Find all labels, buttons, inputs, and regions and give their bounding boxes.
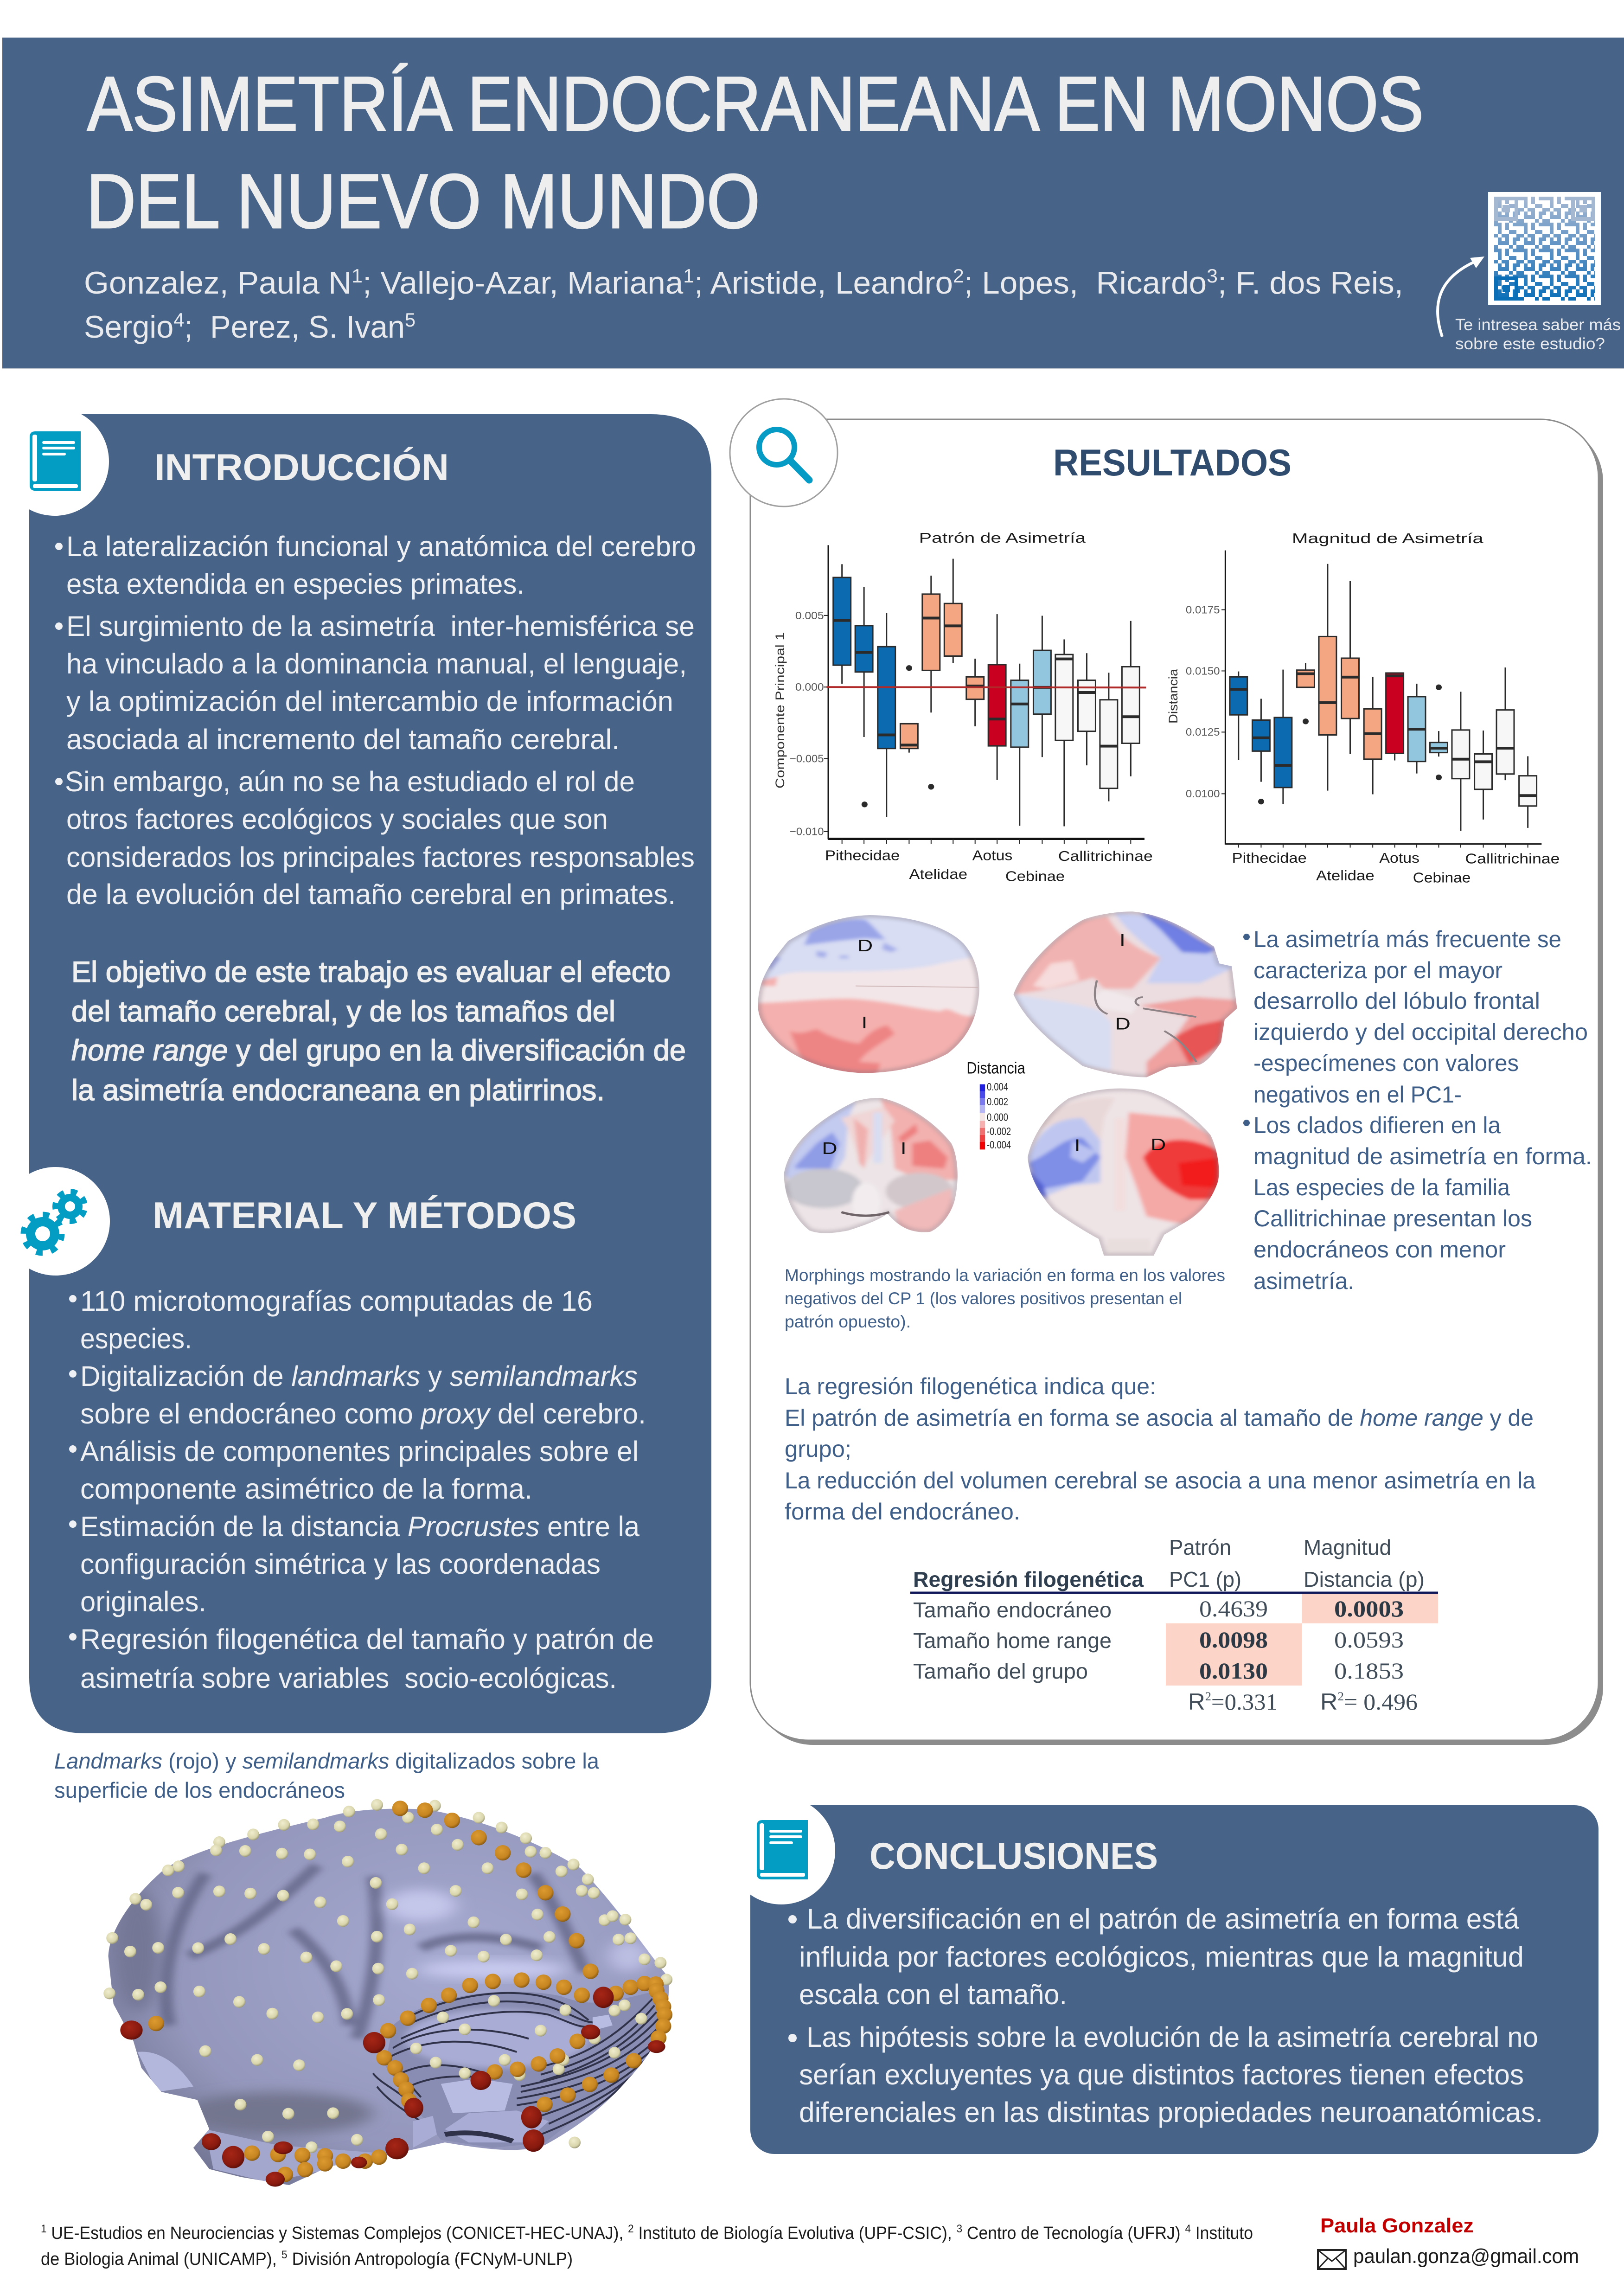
icon: book <box>30 431 81 491</box>
authors: Gonzalez, Paula N <box>84 265 347 301</box>
footnote: affiliations: de Biologia Animal (UNICAMP), <box>41 2250 288 2269</box>
heading: resultados: RESULTADOS <box>1053 442 1292 484</box>
chart: magnitud de asimetria boxplot: 0.0175 <box>1186 604 1220 616</box>
objective statement <box>71 956 686 1107</box>
authors: 3 <box>1207 265 1218 287</box>
chart: patron de asimetria boxplot: Aotus <box>972 847 1012 863</box>
morph: basal view: I <box>1119 931 1125 949</box>
morph: basal view: D <box>1115 1014 1131 1033</box>
legend: distancia colour scale: -0.004 <box>987 1139 1011 1151</box>
introduction bullets: de la evolución del tamaño cerebral en primates. <box>66 878 676 910</box>
left panel: introduction and methods <box>0 399 711 1733</box>
endocranium 3D model with landmarks <box>90 1796 689 2196</box>
methods bullets: Estimación de la distancia Procrustes entre la <box>80 1511 639 1542</box>
table: regresion filogenetica: 0.0098 <box>1199 1627 1268 1653</box>
chart: patron de asimetria boxplot: 0.005 <box>795 610 824 622</box>
footnote: affiliations: 3 <box>957 2223 962 2235</box>
chart: patron de asimetria boxplot: Patrón de Asimetría <box>919 530 1086 545</box>
introduction bullets <box>55 531 696 910</box>
introduction bullets: y la optimización del intercambio de información <box>66 686 673 717</box>
results bullets: caracteriza por el mayor <box>1253 957 1503 983</box>
title: DEL NUEVO MUNDO <box>86 159 760 244</box>
chart: magnitud de asimetria boxplot: Pithecidae <box>1232 850 1307 866</box>
legend: distancia colour scale: 0.000 <box>987 1111 1008 1123</box>
results bullets: izquierdo y del occipital derecho <box>1253 1019 1588 1045</box>
legend: distancia colour scale: 0.002 <box>987 1096 1008 1108</box>
footnote: affiliations: Instituto de Biología Evolutiva (UPF-CSIC), <box>634 2224 957 2243</box>
methods bullets: asimetría sobre variables socio-ecológicas. <box>80 1662 617 1694</box>
footnote: affiliations: Instituto <box>1191 2224 1253 2243</box>
authors: 4 <box>173 309 184 331</box>
conclusions bullets: diferenciales en las distintas propiedades neuroanatómicas. <box>799 2096 1543 2128</box>
conclusions bullets: escala con el tamaño. <box>799 1979 1067 2010</box>
icon: book <box>757 1820 808 1879</box>
introduction bullets: esta extendida en especies primates. <box>66 568 524 600</box>
QR caption: Te intresea saber más <box>1455 316 1621 334</box>
morph: frontal view: D <box>822 1139 838 1158</box>
title: ASIMETRÍA ENDOCRANEANA EN MONOS <box>87 61 1424 147</box>
arrow to QR <box>1438 256 1484 337</box>
methods bullets: especies. <box>80 1323 192 1354</box>
authors: ; Lopes, Ricardo <box>964 265 1207 301</box>
chart: patron de asimetria boxplot: −0.010 <box>790 826 824 838</box>
introduction bullets: Sin embargo, aún no se ha estudiado el rol de <box>65 766 635 797</box>
table: regresion filogenetica: R <box>1188 1689 1205 1715</box>
methods bullets: Regresión filogenética del tamaño y patrón de <box>80 1623 654 1655</box>
morph: occipital view: D <box>1151 1135 1166 1154</box>
introduction bullets: otros factores ecológicos y sociales que son <box>66 803 608 835</box>
legend: distancia colour scale: Distancia <box>966 1059 1025 1077</box>
table: regresion filogenetica: R <box>1320 1689 1337 1715</box>
conclusions bullets: La diversificación en el patrón de asimetría en forma está <box>807 1903 1519 1935</box>
legend: distancia colour scale: -0.002 <box>987 1125 1011 1137</box>
landmarks caption: Landmarks (rojo) y semilandmarks digitalizados sobre la <box>54 1749 600 1773</box>
title <box>86 61 1424 244</box>
morph: frontal view <box>784 1098 958 1233</box>
table: regresion filogenetica: Tamaño del grupo <box>913 1659 1088 1683</box>
conclusions bullets: serían excluyentes ya que distintos factores tienen efectos <box>799 2059 1524 2090</box>
footnote: affiliations <box>41 2223 1253 2269</box>
table: regresion filogenetica: 2 <box>1205 1690 1211 1703</box>
morph: top view: I <box>862 1013 867 1032</box>
chart: y axis title magnitud: Distancia <box>1166 668 1180 724</box>
chart: patron de asimetria boxplot: Callitrichinae <box>1058 848 1153 864</box>
chart: magnitud de asimetria boxplot: Magnitud de Asimetría <box>1292 531 1483 546</box>
methods bullets: Digitalización de landmarks y semilandmarks <box>80 1360 638 1392</box>
table: regresion filogenetica: Magnitud <box>1304 1535 1391 1559</box>
footnote: affiliations: 1 <box>41 2223 46 2235</box>
QR code <box>1488 192 1601 305</box>
methods bullets: configuración simétrica y las coordenadas <box>80 1548 601 1580</box>
introduction bullets: ha vinculado a la dominancia manual, el lenguaje, <box>66 648 687 680</box>
table: regresion filogenetica: PC1 (p) <box>1169 1567 1241 1591</box>
morph: frontal view: I <box>901 1139 907 1158</box>
table: regresion filogenetica: =0.331 <box>1211 1689 1278 1715</box>
footnote: affiliations: 5 <box>281 2249 288 2261</box>
heading: introduccion: INTRODUCCIÓN <box>154 446 449 488</box>
results bullets: Callitrichinae presentan los <box>1253 1205 1532 1231</box>
chart: patron de asimetria boxplot <box>790 530 1153 884</box>
regression text <box>785 1373 1535 1525</box>
table: regresion filogenetica: 0.4639 <box>1199 1596 1268 1622</box>
table: regresion filogenetica: 0.0130 <box>1199 1658 1268 1684</box>
morphing caption <box>785 1266 1225 1331</box>
chart: magnitud de asimetria boxplot: 0.0100 <box>1186 788 1220 800</box>
landmarks caption: superficie de los endocráneos <box>54 1778 345 1802</box>
objective statement: la asimetría endocraneana en platirrinos. <box>71 1074 605 1107</box>
QR caption: sobre este estudio? <box>1455 335 1605 353</box>
footnote: affiliations: Centro de Tecnología (UFRJ) <box>962 2224 1185 2243</box>
morph: basal view <box>1014 911 1237 1077</box>
table: regresion filogenetica <box>910 1535 1438 1715</box>
chart: patron de asimetria boxplot: 0.000 <box>795 681 824 693</box>
table: regresion filogenetica: 0.0003 <box>1334 1596 1404 1622</box>
methods bullets: 110 microtomografías computadas de 16 <box>80 1285 593 1317</box>
authors: 5 <box>405 309 416 331</box>
table: regresion filogenetica: Tamaño endocráneo <box>913 1598 1112 1622</box>
results bullets: endocráneos con menor <box>1253 1237 1506 1263</box>
objective statement: home range y del grupo en la diversificación de <box>71 1034 686 1067</box>
chart: patron de asimetria boxplot: Cebinae <box>1005 868 1065 884</box>
methods bullets: componente asimétrico de la forma. <box>80 1473 532 1505</box>
conclusions bullets: Las hipótesis sobre la evolución de la asimetría cerebral no <box>806 2021 1538 2053</box>
authors: ; Perez, S. Ivan <box>184 309 405 345</box>
QR caption <box>1455 316 1621 353</box>
table: regresion filogenetica: 2 <box>1337 1690 1344 1703</box>
footnote: affiliations: 2 <box>628 2223 634 2235</box>
methods bullets: originales. <box>80 1586 206 1617</box>
results bullets: Las especies de la familia <box>1253 1174 1510 1200</box>
table: regresion filogenetica: Tamaño home range <box>913 1628 1112 1653</box>
morph: top view <box>758 915 979 1073</box>
footnote: affiliations: División Antropología (FCNyM-UNLP) <box>288 2250 573 2269</box>
landmarks caption <box>54 1749 600 1802</box>
contact: email: paulan.gonza@gmail.com <box>1353 2245 1579 2268</box>
authors: 1 <box>352 265 363 287</box>
table: regresion filogenetica: Regresión filogenética <box>913 1567 1144 1591</box>
table: regresion filogenetica: 0.1853 <box>1334 1658 1404 1684</box>
introduction bullets: El surgimiento de la asimetría inter-hemisférica se <box>66 610 695 642</box>
heading: conclusiones: CONCLUSIONES <box>870 1835 1158 1877</box>
chart: magnitud de asimetria boxplot <box>1186 531 1560 885</box>
authors <box>84 265 1403 345</box>
results bullets: asimetría. <box>1253 1268 1354 1294</box>
legend: distancia colour scale <box>966 1059 1025 1151</box>
results bullets: La asimetría más frecuente se <box>1253 926 1561 952</box>
objective statement: del tamaño cerebral, y de los tamaños del <box>71 995 615 1028</box>
authors: 2 <box>953 265 964 287</box>
morph: occipital view <box>1023 1084 1225 1258</box>
chart: magnitud de asimetria boxplot: Cebinae <box>1413 870 1471 885</box>
methods bullets: Análisis de componentes principales sobre el <box>80 1436 639 1467</box>
panel: conclusiones <box>696 1795 1598 2154</box>
footnote: affiliations: 4 <box>1185 2223 1191 2235</box>
chart: magnitud de asimetria boxplot: Atelidae <box>1316 868 1375 884</box>
chart: y axis title patron: Componente Principal 1 <box>773 632 787 789</box>
results bullets <box>1243 926 1592 1294</box>
header banner <box>2 38 1624 369</box>
authors: ; Aristide, Leandro <box>694 265 953 301</box>
conclusions bullets <box>788 1903 1543 2128</box>
chart: magnitud de asimetria boxplot: 0.0150 <box>1186 665 1220 677</box>
introduction bullets: asociada al incremento del tamaño cerebral. <box>66 724 620 755</box>
panel: resultados <box>730 399 1603 1745</box>
results bullets: negativos en el PC1- <box>1253 1082 1462 1108</box>
regression text: forma del endocráneo. <box>785 1499 1020 1525</box>
table: regresion filogenetica: Patrón <box>1169 1535 1231 1559</box>
regression text: La reducción del volumen cerebral se asocia a una menor asimetría en la <box>785 1468 1535 1494</box>
contact: author name: Paula Gonzalez <box>1320 2214 1474 2237</box>
morph: top view: D <box>857 936 873 955</box>
authors: Sergio <box>84 309 175 345</box>
regression text: grupo; <box>785 1436 851 1462</box>
landmarks: red points <box>120 1987 665 2186</box>
table: regresion filogenetica: 0.0593 <box>1334 1627 1404 1653</box>
methods bullets: sobre el endocráneo como proxy del cerebro. <box>80 1398 646 1430</box>
table: regresion filogenetica: = 0.496 <box>1344 1689 1418 1715</box>
chart: magnitud de asimetria boxplot: Aotus <box>1379 850 1419 866</box>
semilandmarks: cream points <box>103 1799 672 2153</box>
regression text: El patrón de asimetría en forma se asocia al tamaño de home range y de <box>785 1405 1534 1431</box>
methods bullets <box>69 1285 654 1694</box>
table: regresion filogenetica: Distancia (p) <box>1304 1567 1425 1591</box>
semilandmarks: orange points <box>148 1801 672 2182</box>
morphing figures <box>742 904 1246 1258</box>
introduction bullets: La lateralización funcional y anatómica del cerebro <box>66 531 696 562</box>
morph: occipital view: I <box>1074 1136 1081 1154</box>
results bullets: desarrollo del lóbulo frontal <box>1253 988 1540 1014</box>
results bullets: -especímenes con valores <box>1253 1050 1519 1076</box>
regression text: La regresión filogenética indica que: <box>785 1373 1156 1399</box>
chart: magnitud de asimetria boxplot: 0.0125 <box>1186 726 1220 738</box>
morphing caption: patrón opuesto). <box>785 1312 911 1331</box>
icon: gears <box>24 1188 88 1253</box>
morphing caption: Morphings mostrando la variación en forma en los valores <box>785 1266 1225 1285</box>
chart: patron de asimetria boxplot: Atelidae <box>909 866 967 882</box>
authors: ; F. dos Reis, <box>1218 265 1403 301</box>
results bullets: magnitud de asimetría en forma. <box>1253 1143 1592 1169</box>
legend: distancia colour scale: 0.004 <box>987 1081 1008 1093</box>
conclusions bullets: influida por factores ecológicos, mientras que la magnitud <box>799 1941 1524 1973</box>
results bullets: Los clados difieren en la <box>1253 1112 1501 1138</box>
chart: patron de asimetria boxplot: Pithecidae <box>825 847 900 863</box>
footnote: affiliations: UE-Estudios en Neurociencias y Sistemas Complejos (CONICET-HEC-UNAJ), <box>46 2224 628 2243</box>
icon: magnifying glass <box>759 430 809 480</box>
chart: patron de asimetria boxplot: −0.005 <box>790 753 824 765</box>
morphing caption: negativos del CP 1 (los valores positivos presentan el <box>785 1289 1182 1308</box>
heading: material y metodos: MATERIAL Y MÉTODOS <box>153 1194 576 1237</box>
objective statement: El objetivo de este trabajo es evaluar el efecto <box>71 956 671 988</box>
authors: 1 <box>683 265 694 287</box>
introduction bullets: considerados los principales factores responsables <box>66 841 695 873</box>
authors: ; Vallejo-Azar, Mariana <box>363 265 683 301</box>
